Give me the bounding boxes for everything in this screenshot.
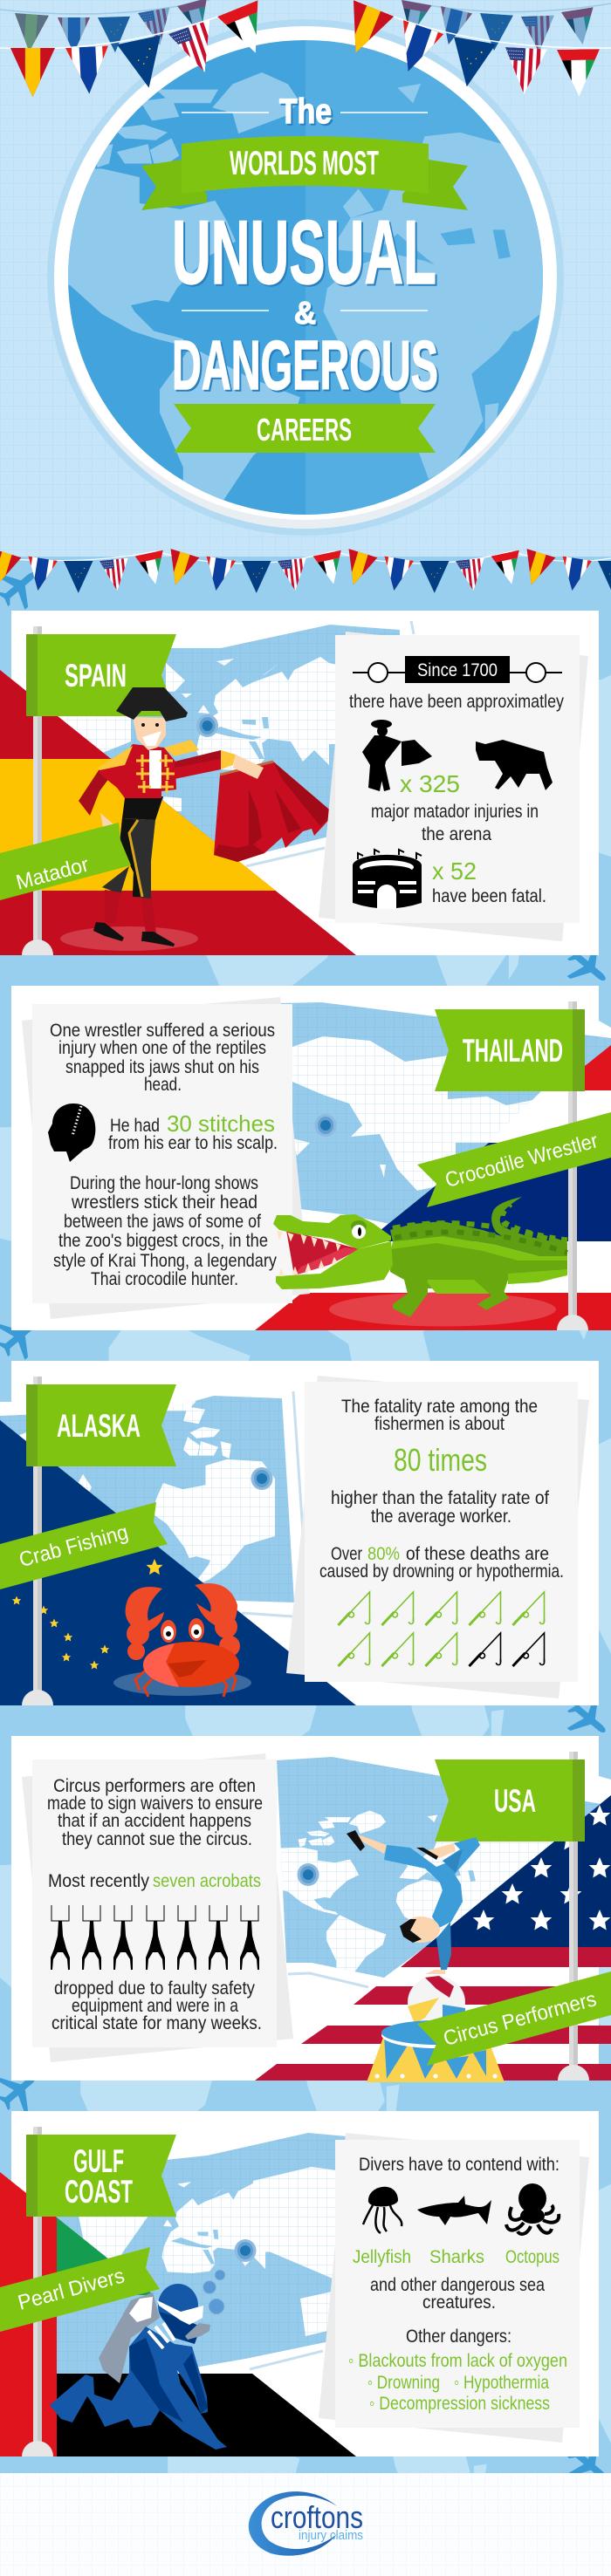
labels: sea creatures [353,2247,560,2267]
text: Other dangers: [406,2327,511,2347]
logo: croftons: injury claims [299,2528,363,2543]
ribbon: careers [174,404,436,453]
labels: sea creatures: Sharks [429,2247,484,2267]
flag of thailand [255,1045,611,1330]
diver character [50,2284,227,2450]
stat: 80 percent: of these deaths are [406,1544,549,1564]
text [51,1978,262,2033]
logo: croftons [249,2491,363,2556]
since 1700 label [353,656,562,683]
text: injury when one of the reptiles [58,1038,266,1058]
crab character [113,1583,251,1697]
panel: spain [0,611,599,955]
circus ball and podium [367,1976,505,2082]
stat: seven acrobats: seven acrobats [153,1871,261,1891]
bunting: lower row [0,549,611,593]
icon: shark [417,2196,491,2225]
stat: 52: x 52 [432,858,477,885]
title: ampersand: & [294,295,316,331]
header background [0,0,611,557]
list: other dangers [348,2351,567,2414]
country flag: usa: USA [494,1783,536,1819]
text [53,1173,277,1289]
crocodile character [273,1197,567,1326]
footer [0,2473,611,2576]
text: made to sign waivers to ensure [47,1794,263,1814]
flag pole [22,2127,53,2456]
stat: 80 percent: caused by drowning or hypothermia. [319,1561,564,1582]
flag of uae [0,2172,356,2456]
ribbon: worlds most: WORLDS MOST [230,145,379,182]
map: europe [58,621,415,867]
country flag: spain: SPAIN [65,658,127,694]
flag pole [558,1752,589,2081]
stat: 80 percent: 80% [367,1544,400,1564]
icon: bull silhouette [476,740,553,790]
banner: crocodile wrestler [417,1112,611,1207]
stat: 30 stitches: 30 stitches [167,1110,275,1137]
country flag: gulf coast [26,2135,176,2217]
text [50,1021,275,1095]
text: fishermen is about [374,1414,505,1434]
stat: 30 stitches: He had [110,1116,160,1136]
list: other dangers: ◦ Drowning [367,2373,440,2393]
stat: seven acrobats: Most recently [48,1871,149,1891]
paper: matador statistics [319,632,588,941]
stat: 80 percent [319,1544,564,1582]
banner: crocodile wrestler: Crocodile Wrestler [443,1129,601,1192]
country flag: gulf coast: GULF [73,2143,124,2179]
banner: pearl divers [0,2247,160,2332]
stat: seven acrobats [48,1871,261,1891]
bubbles [203,2270,225,2314]
acrobat character [347,1830,480,1974]
paper: circus facts [22,1753,293,2062]
text: The fatality rate among the [341,1397,538,1417]
text: style of Krai Thong, a legendary [53,1251,277,1271]
flag pole [22,626,53,955]
panel: gulf coast [0,2111,599,2456]
title: The: The [279,92,332,131]
text: higher than the fatality rate of [331,1488,549,1508]
text: and other dangerous sea [370,2275,545,2295]
banner: matador [0,823,131,900]
text: have been fatal. [432,886,546,906]
text: Circus performers are often [53,1776,256,1796]
paper: crocodile facts [22,997,310,1319]
text: Thai crocodile hunter. [91,1269,238,1289]
logo: croftons: croftons [271,2499,363,2535]
text: Divers have to contend with: [359,2155,560,2175]
flag of spain [0,670,356,955]
text: that if an accident happens [58,1811,251,1831]
text [47,1776,263,1849]
text: head. [144,1075,182,1095]
text: dropped due to faulty safety [54,1978,255,1999]
text: the average worker. [371,1507,511,1527]
panel: usa [11,1736,611,2082]
country flag: alaska [26,1384,176,1466]
country flag: usa [435,1759,585,1841]
stat: 325: x 325 [400,770,460,797]
map: americas [277,1757,611,1989]
icon: octopus [506,2183,559,2234]
country flag: gulf coast: COAST [65,2174,133,2210]
list: other dangers: ◦ Blackouts from lack of oxygen [348,2351,567,2371]
panel: thailand [11,986,611,1330]
matador character [60,687,334,951]
flag of alaska [0,1420,356,1705]
icon chart: fishing rods [339,1592,545,1666]
country flag: spain [26,634,176,716]
icon: stadium [353,850,422,909]
text: the arena [422,824,491,844]
world map band [0,626,611,2576]
text: creatures. [422,2292,496,2313]
flag pole [557,1001,588,1330]
ribbon: careers: CAREERS [257,412,352,448]
stat: 80 times: 80 times [394,1442,487,1478]
stat: 80 percent: Over [331,1544,362,1564]
list: other dangers: ◦ Hypothermia [454,2373,549,2393]
flag of usa [255,1795,611,2081]
text [370,2275,545,2347]
bunting: top front row [0,0,611,97]
title: unusual: UNUSUAL [172,202,436,304]
text [371,802,539,844]
icon: matador silhouette [362,720,432,791]
icon: head with stitches [48,1104,95,1162]
text [331,1488,549,1527]
text: equipment and were in a [72,1996,238,2016]
text: wrestlers stick their head [71,1192,257,1213]
map: africa and asia [281,1002,611,1224]
paper: diver facts [319,2133,589,2443]
icon: jellyfish [363,2187,402,2233]
labels: sea creatures: Octopus [505,2247,560,2267]
text: the zoo's biggest crocs, in the [58,1231,268,1251]
text: critical state for many weeks. [51,2013,262,2033]
stat: 30 stitches: from his ear to his scalp. [108,1133,278,1153]
text: major matador injuries in [371,802,539,822]
text: they cannot sue the circus. [62,1829,252,1849]
panel: alaska [0,1361,599,1705]
country flag: thailand [435,1009,585,1091]
text: snapped its jaws shut on his [65,1057,259,1077]
map: middle east [56,2133,346,2374]
country flag: alaska: ALASKA [57,1408,141,1444]
stat: 30 stitches [108,1110,278,1153]
ribbon: worlds most [141,136,468,210]
text: One wrestler suffered a serious [50,1021,275,1041]
bunting: top back row [0,0,611,53]
plane icons [0,557,611,2494]
banner: circus performers [417,1971,611,2066]
flag pole [22,1377,53,1705]
since 1700 label: Since 1700 [417,660,498,680]
map: north america [0,1390,303,1617]
text: there have been approximatley [349,692,564,712]
banner: matador: Matador [14,853,92,895]
banner: crab fishing [0,1502,168,1589]
labels: sea creatures: Jellyfish [353,2247,411,2267]
text: between the jaws of some of [64,1212,261,1232]
globe [47,19,564,536]
icon chart: acrobats [51,1905,259,1970]
banner: pearl divers: Pearl Divers [16,2264,127,2315]
paper: fishing facts [286,1376,589,1698]
banner: circus performers: Circus Performers [441,1987,599,2051]
text [341,1397,538,1434]
list: other dangers: ◦ Decompression sickness [369,2394,550,2414]
text: During the hour-long shows [70,1173,258,1193]
banner: crab fishing: Crab Fishing [17,1520,131,1572]
